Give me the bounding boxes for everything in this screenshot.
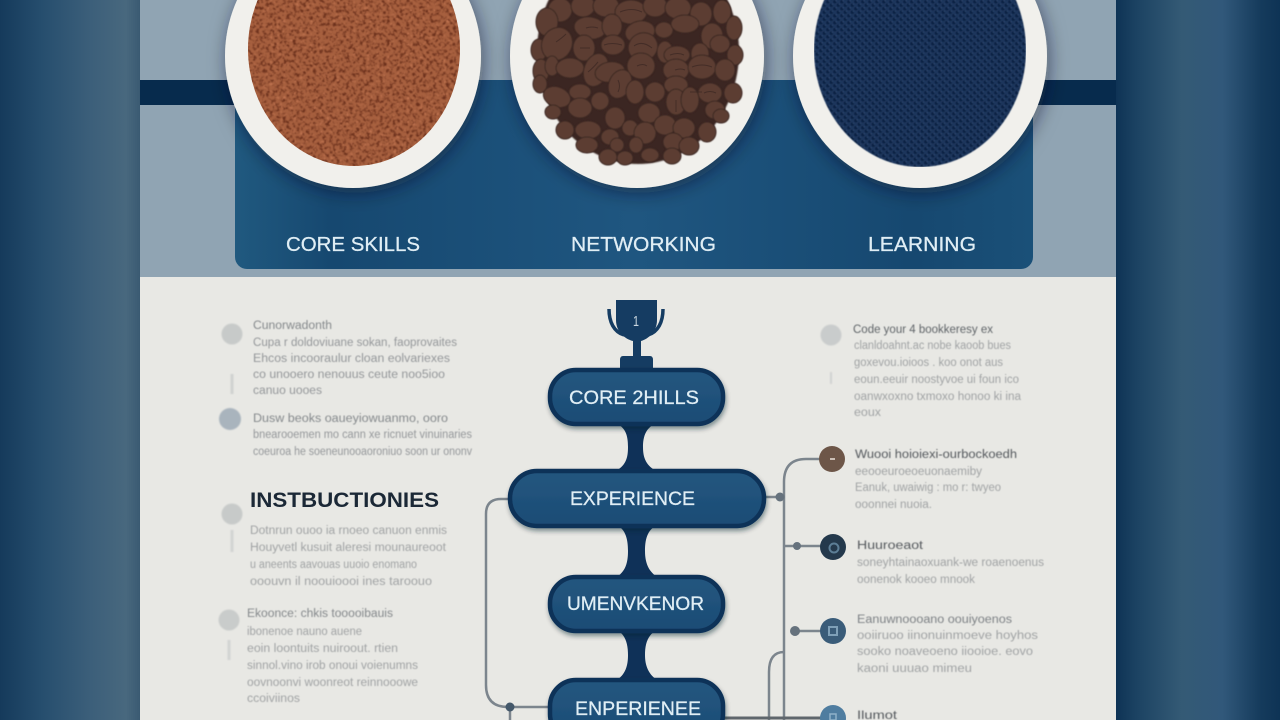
text block: left 4: Ekoonce: chkis tooooibauis [247, 608, 393, 620]
text block: right 1: goxevou.ioioos . koo onot aus [854, 357, 1003, 369]
icon node: blue [820, 618, 846, 644]
text block: right 2: ooonnei nuoia. [855, 499, 932, 511]
heading: instructions: INSTBUCTIONIES [250, 489, 439, 512]
text block: left 2: bnearooemen mo cann xe ricnuet vinuinaries [253, 429, 472, 441]
text block: left 2 [253, 413, 472, 458]
top label: learning: LEARNING [868, 234, 976, 256]
text block: left 1: Ehcos incooraulur cloan eolvariexes [253, 353, 450, 365]
text block: left 1: Cunorwadonth [253, 320, 332, 332]
text block: right 3: soneyhtainaoxuank-we roaenoenus [857, 557, 1044, 569]
right timeline node: faded [820, 324, 842, 384]
text block: left 3: ooouvn il noouioooi ines taroouo [250, 576, 432, 588]
text block: right 3: oonenok kooeo mnook [857, 574, 975, 586]
pill: experience lower [550, 680, 723, 720]
text block: right 2: Wuooi hoioiexi-ourbockoedh [855, 449, 1017, 461]
text block: left 1 [253, 320, 457, 397]
top label: core skills: CORE SKILLS [286, 234, 420, 256]
text block: left 4: eoin loontuits nuiroout. rtien [247, 643, 398, 655]
pill: core skills [550, 370, 723, 424]
text block: left 1: co unooero nenouus ceute noo5ioo [253, 369, 445, 381]
text block: right 2: eeooeuroeoeuonaemiby [855, 466, 982, 478]
text block: right 4 [857, 614, 1038, 675]
text block: left 4: ccoiviinos [247, 693, 300, 705]
text block: right 1: oanwxoxno txmoxo honoo ki ina [854, 391, 1022, 403]
bowl: powder [225, 0, 481, 188]
bowl: coffee beans [510, 0, 764, 188]
pill: experience [510, 471, 764, 526]
top label: networking: NETWORKING [571, 234, 716, 256]
text block: left 4: ibonenoe nauno auene [247, 626, 362, 638]
powder fill [248, 0, 460, 166]
text block: left 4: sinnol.vino irob onoui voienumns [247, 660, 418, 672]
text block: left 1: Cupa r doldoviuane sokan, faoprovaites [253, 337, 457, 349]
text block: left 2: Dusw beoks oaueyiowuanmo, ooro [253, 413, 448, 425]
text block: left 4: oovnoonvi woonreot reinnooowe [247, 677, 418, 689]
text block: right 4: Eanuwnoooano oouiyoenos [857, 614, 1012, 626]
text block: right 4: ooiiruoo iinonuinmoeve hoyhos [857, 630, 1038, 642]
pill label: ENPERIENEE [575, 699, 701, 720]
background: left band [0, 0, 140, 720]
text block: left 3 [250, 525, 447, 588]
text block: right 4: kaoni uuuao mimeu [857, 663, 972, 675]
text block: right 1: clanldoahnt.ac nobe kaoob bues [854, 340, 1011, 352]
fabric fill [814, 0, 1026, 167]
icon node: light blue [820, 705, 846, 720]
pill label: CORE 2HILLS [569, 388, 699, 409]
bowl: navy fabric [793, 0, 1047, 188]
left timeline nodes [218, 324, 242, 660]
text block: right 4: sooko noaveoeno iiooioe. eovo [857, 646, 1033, 658]
panel: top header [140, 0, 1116, 277]
header dark stripe right [1028, 80, 1116, 105]
icon: trophy [609, 300, 663, 372]
icon node: dark [820, 534, 846, 560]
header dark stripe left [140, 80, 240, 105]
background: right band [1116, 0, 1280, 720]
text block: right 1: eoun.eeuir noostyvoe ui foun ico [854, 374, 1019, 386]
right connector lines [722, 459, 822, 720]
text block: right 2: Eanuk, uwaiwig : mo r: twyeo [855, 482, 1001, 494]
bean creases [556, 10, 716, 112]
beans [531, 0, 743, 165]
text block: left 3: u aneents aavouas uuoio enomano [250, 559, 417, 571]
panel: blue label band [235, 80, 1033, 269]
text block: right 3 [857, 540, 1044, 586]
text block: left 2: coeuroa he soeneunooaoroniuo soon ur ononv [253, 446, 472, 458]
pill: unenvkenor [550, 577, 723, 631]
pill label: EXPERIENCE [570, 489, 695, 510]
text block: right 1: eoux [854, 407, 881, 419]
text block: left 3: Dotnrun ouoo ia rnoeo canuon enmis [250, 525, 447, 537]
trophy number: 1 [633, 313, 639, 330]
text block: right 1: Code your 4 bookkeresy ex [853, 324, 993, 336]
text block: left 1: canuo uooes [253, 385, 322, 397]
icon node: brown [819, 446, 845, 472]
stem connecting pills [614, 423, 659, 681]
text block: right 3: Huuroeaot [857, 540, 924, 552]
pill label: UMENVKENOR [567, 594, 704, 615]
text block: left 3: Houyvetl kusuit aleresi mounaureoot [250, 542, 447, 554]
left connector line [486, 499, 550, 720]
bean bed [537, 0, 739, 164]
panel: main content [140, 277, 1116, 720]
text block: left 4 [247, 608, 418, 705]
text block: right 1 [853, 324, 1022, 419]
text block: right 2 [855, 449, 1017, 511]
